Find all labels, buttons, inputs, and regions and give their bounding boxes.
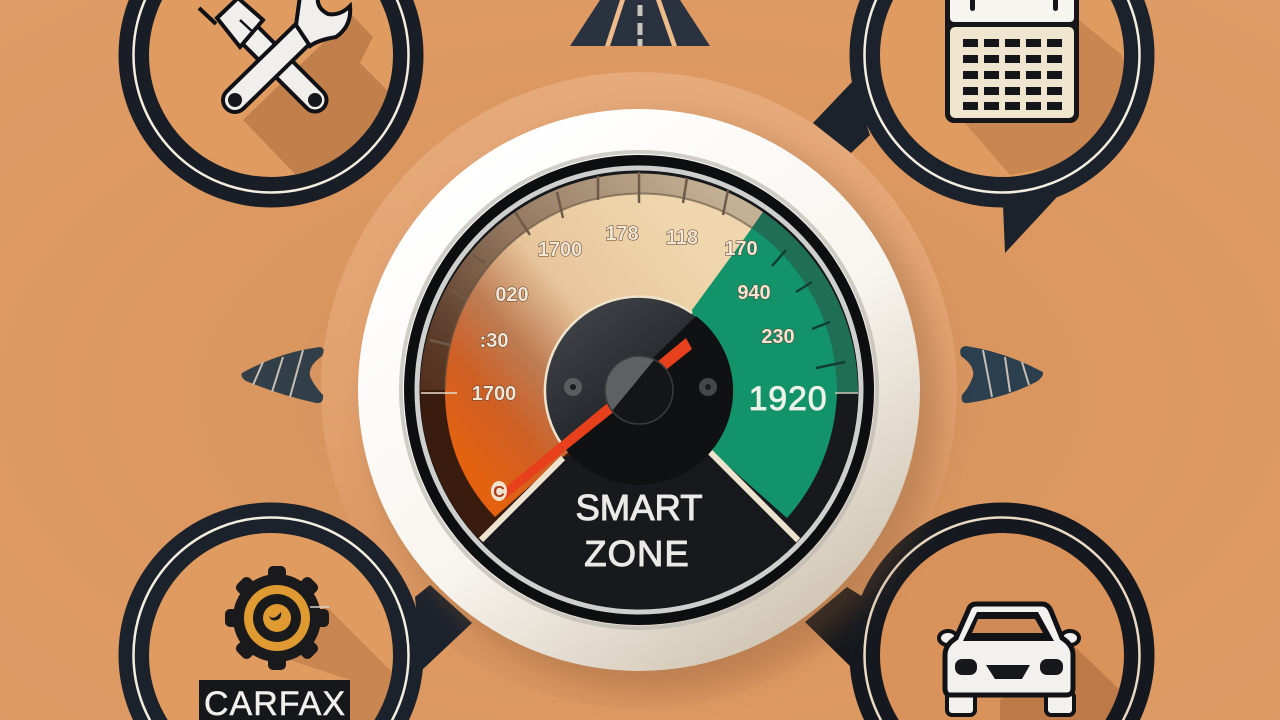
icon: gear	[225, 566, 329, 670]
panel: callout carfax	[118, 502, 472, 720]
icon: calendar	[945, 0, 1079, 123]
gauge numbers: 1700	[472, 383, 516, 405]
gauge numbers: 940	[737, 282, 771, 304]
outer tick band	[420, 174, 763, 393]
panel: callout tools	[118, 0, 424, 208]
gauge bezel	[358, 109, 920, 671]
gauge numbers: 118	[666, 227, 698, 249]
needle	[499, 338, 692, 499]
green outer band	[752, 212, 858, 393]
gauge numbers: C	[493, 484, 505, 501]
gauge numbers: 020	[495, 284, 529, 306]
icon: wrench and screwdriver	[199, 0, 350, 107]
gauge numbers: 178	[605, 223, 639, 245]
gauge numbers: 230	[761, 326, 795, 348]
smart zone label: SMART	[575, 487, 703, 528]
icon: road	[570, 0, 710, 46]
ticks	[430, 172, 728, 345]
smart zone label	[575, 487, 703, 574]
icon: car	[939, 604, 1079, 715]
smart zone wedge	[481, 456, 570, 543]
warm dial zone	[445, 194, 752, 517]
gauge numbers: :30	[480, 330, 508, 352]
gauge face	[415, 165, 865, 620]
gauge numbers	[472, 223, 827, 501]
gauge	[358, 109, 941, 691]
panel: callout calendar	[813, 0, 1154, 253]
gauge numbers: 1920	[749, 380, 827, 418]
gauge halo	[321, 72, 957, 708]
hub	[545, 297, 733, 485]
smart zone label: ZONE	[584, 533, 690, 574]
panel: callout car	[805, 502, 1154, 720]
gauge numbers: 170	[724, 238, 758, 260]
icon: right arrow	[960, 346, 1043, 403]
icon: left arrow	[242, 347, 324, 403]
green zone	[692, 228, 837, 518]
gauge numbers: 1700	[538, 239, 582, 261]
